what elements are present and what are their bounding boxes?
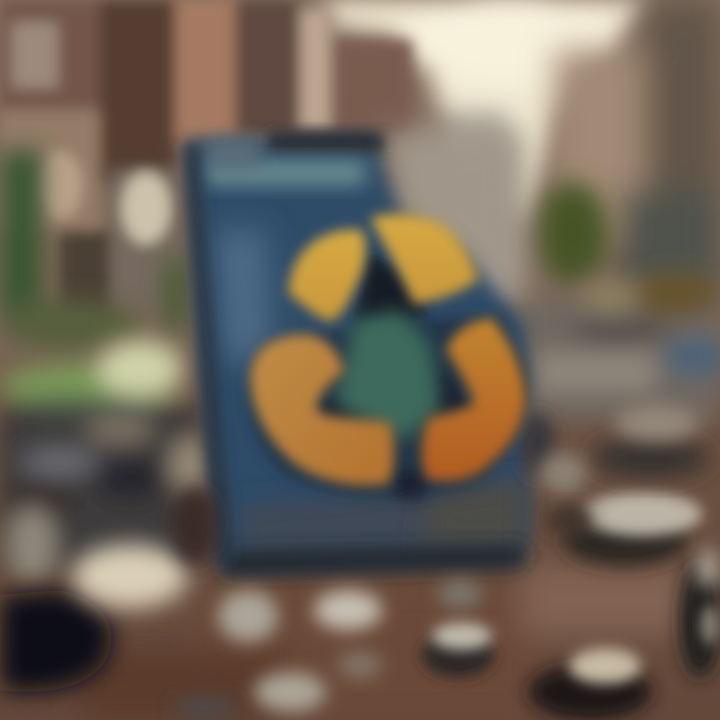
dark shadow behind symbol <box>248 252 527 500</box>
left side: green lid and debris <box>0 340 210 583</box>
bin label strip <box>205 160 365 186</box>
buildings: right group <box>555 0 720 290</box>
recycling symbol <box>248 214 527 500</box>
sky glow <box>325 0 650 300</box>
scattered recycling: lower right <box>528 405 720 720</box>
ground: brown soil <box>80 565 690 720</box>
right side: distant bins and blue item <box>520 274 720 420</box>
tree: left <box>0 150 42 320</box>
shadow beside bin <box>522 413 554 477</box>
arrow: top right yellow <box>370 214 478 304</box>
buildings: left group <box>0 0 412 320</box>
scattered recycling: lower centre <box>173 580 494 720</box>
recycling bin body <box>184 130 554 576</box>
bin lid <box>268 132 383 152</box>
tree: right <box>536 182 608 282</box>
arrow: right orange <box>422 318 526 481</box>
arrow: top left yellow <box>288 230 366 322</box>
arrow: left orange <box>250 334 394 485</box>
symbol centre: teal <box>335 310 440 440</box>
scattered recycling: lower left <box>0 487 217 692</box>
trees <box>0 150 608 351</box>
